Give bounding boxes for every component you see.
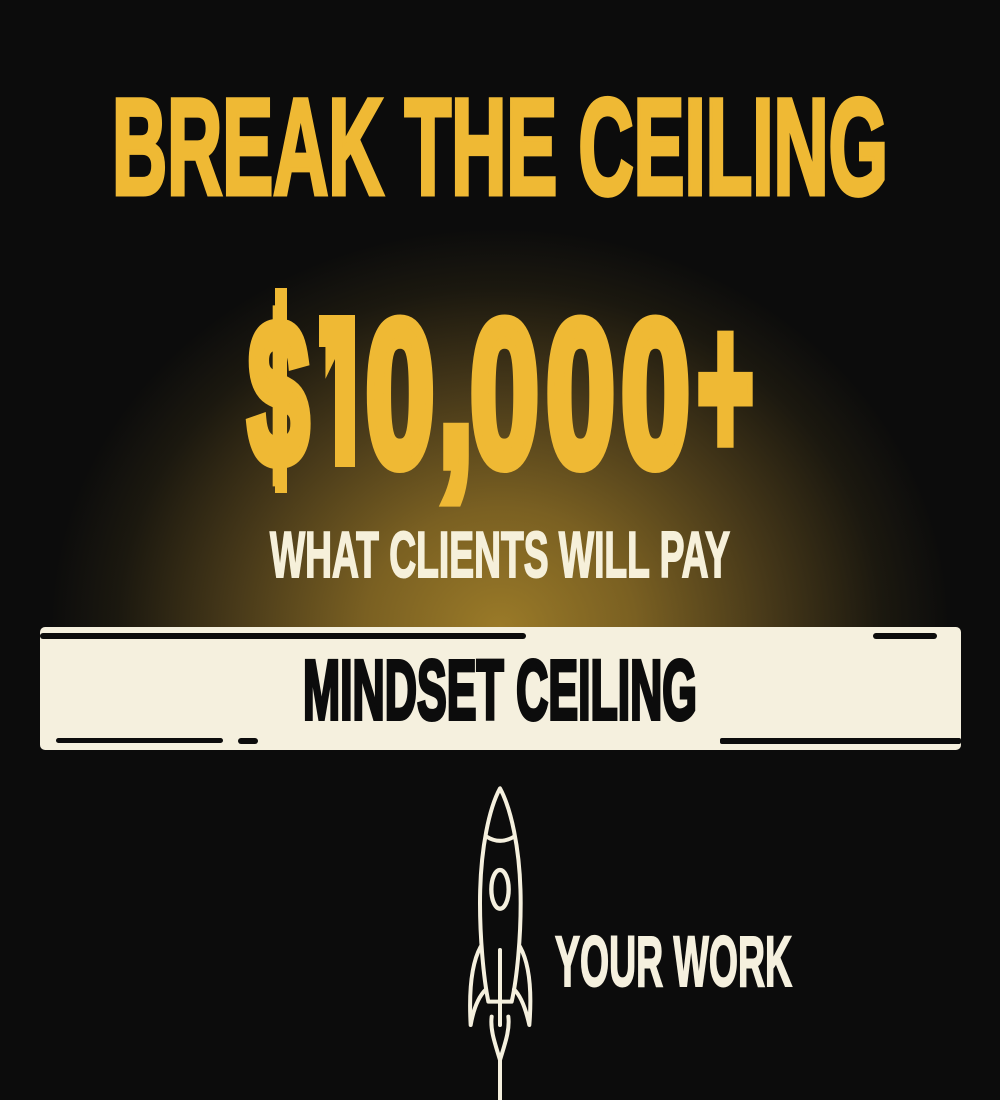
icon: rocket: [470, 788, 530, 1100]
price figure: 0: [366, 278, 435, 510]
crack lines: [40, 633, 961, 744]
price figure: [246, 288, 753, 507]
price figure: +: [697, 272, 754, 503]
price figure: 0: [621, 278, 690, 510]
price figure: 0: [546, 278, 615, 510]
bar body: [40, 627, 961, 750]
price figure: 1: [323, 279, 358, 510]
price figure: ,: [438, 254, 474, 513]
rocket label: YOUR WORK: [555, 923, 792, 1002]
panel: mindset ceiling bar: [40, 627, 961, 750]
price figure: $: [248, 279, 309, 510]
price figure: 0: [470, 278, 539, 510]
background glow: [40, 220, 960, 630]
